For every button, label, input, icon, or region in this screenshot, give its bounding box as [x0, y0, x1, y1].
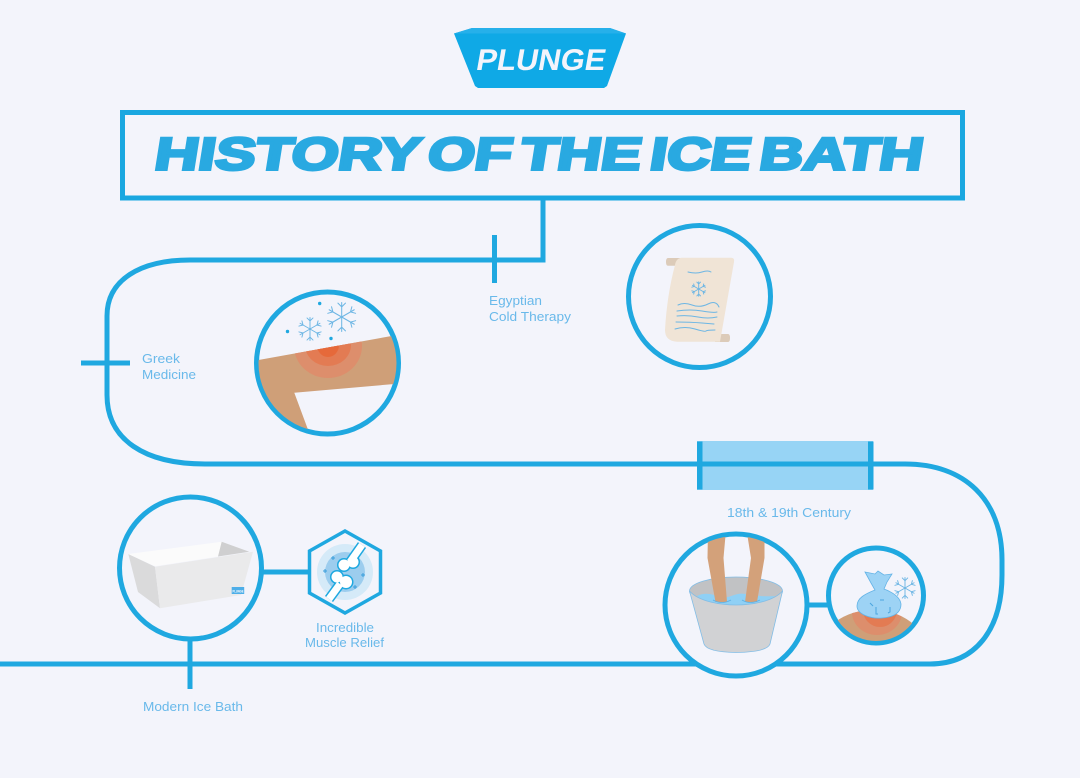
logo: Plunge: PLUNGE: [474, 44, 609, 77]
illustration: feet in ice bucket: [665, 530, 807, 676]
timeline path: [0, 198, 1002, 664]
connector: tub to muscle relief: [262, 570, 310, 574]
tub logo badge: PLUNGE: [232, 588, 244, 594]
title: HISTORY OF THE ICE BATH: [151, 129, 927, 179]
illustration: arm with inflammation and snowflakes: [250, 292, 400, 440]
tub logo badge: [232, 587, 244, 594]
label: Incredible Muscle Relief: Incredible: [316, 620, 374, 635]
marker: Greek Medicine: [81, 351, 196, 382]
label: Incredible Muscle Relief: Muscle Relief: [305, 635, 384, 650]
marker: Egyptian Cold Therapy: [489, 235, 572, 324]
illustration: scroll with snowflake: [628, 226, 770, 368]
marker: Egyptian Cold Therapy: Cold Therapy: [489, 309, 572, 324]
band: 18th and 19th Century: 18th & 19th Century: [727, 505, 852, 520]
logo: Plunge: [454, 28, 626, 88]
marker: Egyptian Cold Therapy: Egyptian: [489, 293, 542, 308]
title box: [122, 112, 962, 198]
icon: joint in hexagon: [310, 531, 380, 613]
connector: bucket to ice bag: [806, 602, 830, 608]
label: Incredible Muscle Relief: [305, 620, 384, 650]
marker: Greek Medicine: Medicine: [142, 367, 196, 382]
illustration: ice bag on inflamed skin: [826, 546, 926, 646]
illustration: modern ice bath tub: [120, 497, 262, 639]
marker: Modern Ice Bath: Modern Ice Bath: [143, 699, 243, 714]
band: 18th and 19th Century: [697, 441, 874, 520]
marker: Greek Medicine: Greek: [142, 351, 181, 366]
marker: Modern Ice Bath: [143, 640, 243, 714]
